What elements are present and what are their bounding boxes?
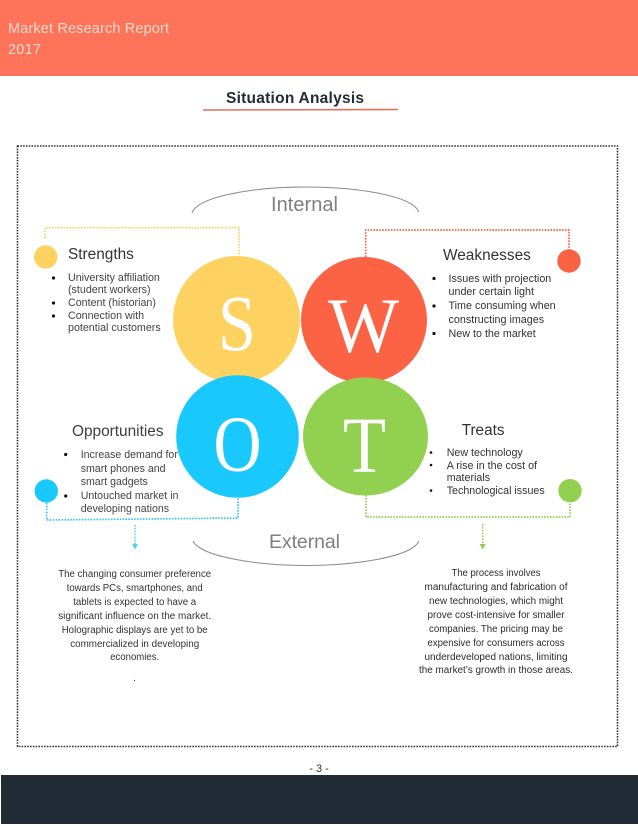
text block: threats note: The process involves [452,568,540,579]
threats heading: Treats [462,422,505,439]
threats list: materials [447,472,490,484]
icon: opportunities dot [35,479,58,503]
weaknesses list [432,273,556,340]
circle S [173,256,300,383]
header band: Market Research Report [8,21,169,37]
text block: opportunities note: The changing consumer preference [58,569,212,580]
arrow: threats [480,524,486,550]
icon: strengths dot [34,245,57,269]
title: Situation Analysis [226,90,364,107]
strengths list: Connection with [68,310,144,322]
text block: opportunities note: Holographic displays are yet to be [62,625,208,636]
dotted frame [18,146,618,746]
footer band [1,775,638,824]
text block: opportunities note: towards PCs, smartphones, and [67,583,203,594]
strengths list: potential customers [68,322,161,334]
internal arc label [192,187,419,216]
panel: weaknesses [366,230,581,340]
opportunities list: Increase demand for [81,449,178,461]
text block: opportunities note [58,569,212,684]
text block: opportunities note: significant influence on the market. [58,611,211,622]
opportunities list [64,449,179,515]
text block: threats note: new technologies, which might [429,596,563,607]
opportunities heading: Opportunities [72,423,164,440]
circle T [303,378,428,496]
external arc label [193,531,419,566]
strengths list [52,272,161,334]
header band: 2017 [8,42,41,58]
threats list: Technological issues [447,485,545,497]
weaknesses list: under certain light [448,286,534,298]
weaknesses list: Time consuming when [448,300,556,312]
strengths list: Content (historian) [68,297,156,309]
opportunities list: smart gadgets [81,476,148,488]
icon: threats dot [558,479,582,502]
text block: opportunities note: commercialized in developing [70,639,199,650]
opportunities list: Untouched market in [81,490,179,502]
text block: threats note [419,568,573,676]
panel: threats [366,422,582,517]
icon: weaknesses dot [557,249,581,273]
strengths list: (student workers) [68,284,151,296]
text block: threats note: prove cost-intensive for smaller [428,610,565,621]
weaknesses heading: Weaknesses [443,247,531,264]
text block: opportunities note: economies. [110,652,159,663]
text block: opportunities note: . [133,673,136,684]
circle O: O [214,402,262,488]
strengths heading: Strengths [68,246,134,263]
threats list: New technology [447,447,523,459]
arrow: opportunities [132,525,138,550]
circle T: T [343,403,386,490]
circle S: S [218,281,256,368]
weaknesses list: New to the market [448,328,536,340]
header band [0,0,638,76]
panel: strengths [34,228,239,334]
weaknesses list: Issues with projection [448,273,551,285]
external arc label: External [269,531,340,553]
text block: opportunities note: tablets is expected to have a [73,597,197,608]
threats list [430,447,545,497]
internal arc label: Internal [271,194,338,216]
weaknesses list: constructing images [448,314,544,326]
text block: threats note: manufacturing and fabrication of [424,582,568,593]
threats list: A rise in the cost of [447,460,537,472]
text block: threats note: underdeveloped nations, limiting [424,652,568,663]
page number: - 3 - [309,763,329,775]
circle O [176,375,299,498]
circle W: W [328,282,399,369]
panel: opportunities [35,423,238,520]
strengths list: University affiliation [68,272,160,284]
text block: threats note: expensive for consumers across [428,638,564,649]
opportunities list: smart phones and [81,463,166,475]
opportunities list: developing nations [81,503,169,515]
circle W [301,257,427,383]
text block: threats note: companies. The pricing may be [429,624,563,635]
text block: threats note: the market’s growth in those areas. [419,665,573,676]
